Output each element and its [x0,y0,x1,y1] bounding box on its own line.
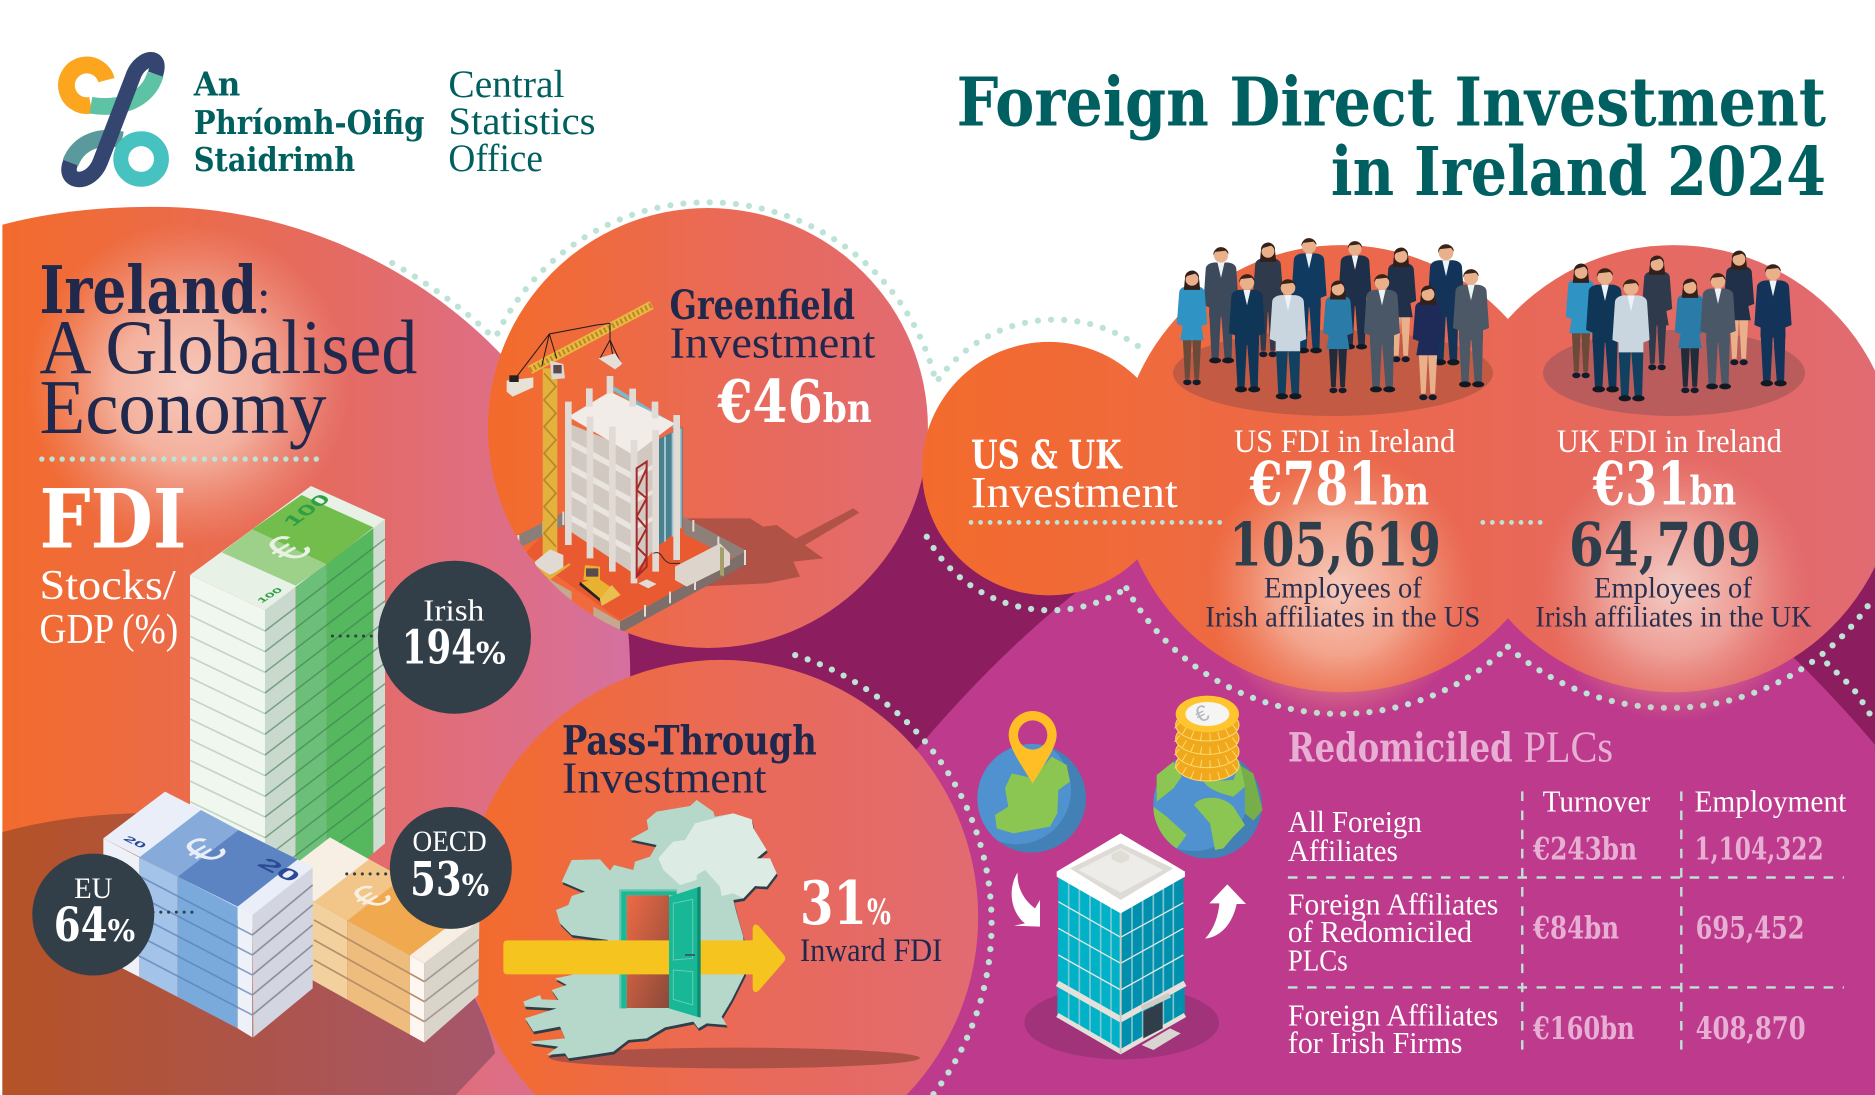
heading: redomiciled PLCs: Redomiciled [1288,724,1513,772]
door frame [619,889,677,1008]
ground shadow [550,1048,920,1068]
column headers: Turnover [1543,784,1651,819]
icon: world globe with coins [1153,696,1263,859]
row labels: All Foreign [1288,804,1422,839]
stat: 31% inward FDI: 31 [800,869,867,939]
heading: Ireland a globalised economy [39,251,417,450]
icon: blue stack of 20 euro notes: 20 [252,855,305,886]
stats: UK FDI [1535,423,1812,633]
heading: redomiciled PLCs: PLCs [1523,723,1613,772]
illustration: crane and building site [507,305,859,633]
table values: 408,870 [1696,1011,1806,1047]
logo text: Irish name: Phríomh-Oifig [194,104,425,142]
logo text: English name: Office [448,136,543,180]
icon: green stack of 100 euro notes: 100 [255,586,285,604]
callout: EU 64% [32,854,154,976]
heading: pass-through investment [562,716,817,803]
icon: blue stack of 20 euro notes: 20 [121,834,149,850]
stats: US FDI: bn [1381,469,1429,514]
stats: UK FDI: Irish affiliates in the UK [1535,600,1812,633]
panel: greenfield circle [488,208,928,648]
building frame [568,423,657,573]
row labels: Foreign Affiliates [1288,998,1498,1033]
stats: UK FDI: bn [1690,469,1736,514]
callout: EU 64%: EU [74,872,112,905]
container and cables [675,543,730,587]
icon: orange stack of euro notes [275,837,479,1043]
door leaf [669,887,700,1018]
callout: Irish 194%: 194 [402,620,476,675]
heading: US and UK investment [971,433,1179,517]
icon: green stack of 100 euro notes [190,486,385,937]
logo text: English name: Statistics [448,99,596,143]
stats: UK FDI: 64,709 [1569,510,1761,580]
heading: greenfield investment: Investment [670,318,876,367]
illustration: people US group [1173,238,1493,416]
icon: orange stack of euro notes: € [337,879,404,915]
map of Ireland [523,800,777,1058]
panel: Ireland a globalised economy background [2,207,630,1095]
callout: EU 64%: 64 [54,897,108,952]
heading: US and UK investment: US & UK [971,433,1123,479]
row labels: for Irish Firms [1288,1025,1462,1060]
ground shadow [2,813,495,1095]
stats: US FDI [1205,423,1480,633]
heading: US and UK investment: Investment [971,468,1179,517]
icon: green stack of 100 euro notes: 100 [279,491,336,530]
highlight glow [26,224,349,546]
logo text: Irish name: Staidrimh [194,141,355,179]
FDI stocks heading: GDP (%) [39,607,178,653]
connector dots [153,636,392,912]
arrow: down into tower [1012,872,1040,927]
heading: greenfield investment [670,281,876,367]
heading: pass-through investment: Investment [562,754,767,803]
table values: €84bn [1532,910,1619,946]
background: magenta redomiciled panel [682,465,1875,1095]
heading: pass-through investment: Pass-Through [562,716,817,764]
illustration: globes, arrows and office tower [962,696,1263,1059]
row labels: of Redomiciled [1288,914,1472,949]
heading: greenfield investment: Greenfield [670,281,855,329]
crane [543,368,557,557]
heading: Ireland a globalised economy: : [257,271,270,324]
stat: 31% inward FDI: % [867,892,891,933]
logo text: English name: Central [448,62,564,106]
icon: office tower [1024,833,1219,1059]
callout: EU 64%: % [108,914,135,949]
table values: 1,104,322 [1694,832,1824,868]
heading: Ireland a globalised economy: Economy [39,364,327,450]
stat: 31% inward FDI [800,869,942,968]
row labels: Affiliates [1288,833,1398,868]
Northern Ireland [658,813,777,898]
callout: OECD 53%: % [462,868,489,903]
callout: Irish 194%: % [476,637,506,672]
FDI stocks heading: FDI [39,473,187,568]
stats: US FDI: Irish affiliates in the US [1205,600,1480,633]
stats: US FDI: 105,619 [1229,510,1441,580]
background: dark purple [598,472,1875,1095]
table values: 695,452 [1696,910,1804,946]
icon: blue stack of 20 euro notes [103,792,313,1037]
illustration: Ireland map with door and arrow [503,800,920,1068]
map shadow [524,803,778,1061]
heading: Ireland a globalised economy: Ireland [39,251,257,329]
stats: US FDI: Employees of [1264,572,1422,605]
stats: UK FDI: Employees of [1594,572,1752,605]
callout: OECD 53%: 53 [410,851,462,906]
table values [1532,832,1824,1047]
FDI stocks heading: Stocks/ [39,563,176,609]
stats: UK FDI: UK FDI in Ireland [1557,423,1782,459]
table values: €243bn [1532,832,1637,868]
panel: US and UK circles [922,245,1875,722]
row labels [1288,804,1498,1060]
stats: UK FDI: €31 [1592,450,1690,519]
logo text: Irish name [193,66,425,179]
callout: OECD 53%: OECD [413,825,487,858]
stats: US FDI: €781 [1249,450,1381,519]
title [957,63,1826,211]
stats: US FDI: US FDI in Ireland [1234,423,1455,459]
stat: 46bn: €46 [717,367,823,436]
stat: 46bn: bn [823,386,872,432]
row labels: PLCs [1288,943,1348,978]
bulldozer [583,565,600,580]
FDI stocks heading [39,473,187,653]
left panel shape [2,207,630,1095]
column headers [1543,784,1847,819]
logo text: English name [448,62,596,180]
dotted arcs [392,202,1875,1095]
illustration: people UK group [1543,251,1805,416]
icon: world globe with coins: € [1190,699,1213,728]
callout: Irish 194%: Irish [423,592,485,627]
site floor and fence [526,520,732,620]
callout: OECD 53% [390,807,512,929]
icon: Ireland globe with pin [977,711,1086,853]
row labels: Foreign Affiliates [1288,887,1498,922]
panel: pass-through circle [464,660,978,1095]
callout: Irish 194% [378,561,531,714]
icon: green stack of 100 euro notes: € [250,528,325,569]
site shadow [687,508,859,587]
red scaffold [637,462,647,577]
heading: Ireland a globalised economy: A Globalised [39,304,417,390]
stat: 31% inward FDI: Inward FDI [800,932,942,968]
table values: €160bn [1532,1011,1635,1047]
logo text: Irish name: An [193,66,240,104]
arrow: up from tower [1205,884,1246,939]
panel: redomiciled PLCs table [1288,723,1847,1060]
arrow [503,925,785,992]
icon: blue stack of 20 euro notes: € [169,831,240,870]
logo: CSO knot mark [66,60,161,179]
column headers: Employment [1694,784,1847,819]
